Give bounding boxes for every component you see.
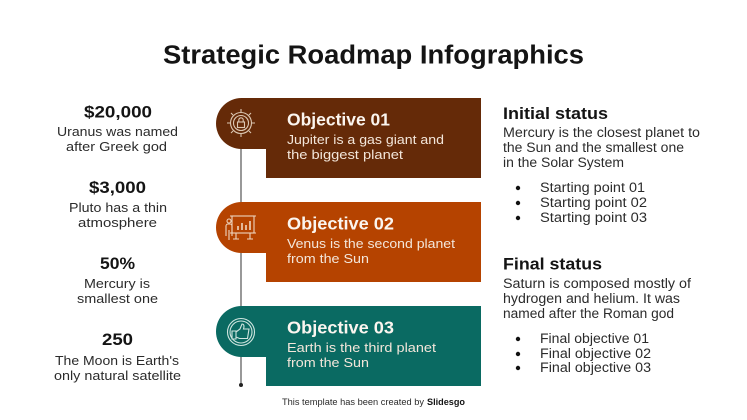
stat: 50% (77, 255, 158, 306)
stat: $20,000: $20,000 (84, 104, 152, 122)
text: final status description: Saturn is composed mostly of (503, 276, 691, 291)
text: initial status description: the Sun and the smallest one (503, 140, 684, 155)
text: initial status description: in the Solar System (503, 155, 624, 170)
panel: final status (503, 254, 691, 375)
text: objective 03 description (287, 340, 436, 370)
icon: presentation board (226, 216, 256, 240)
list: starting points: Starting point 02 (540, 195, 647, 210)
text: objective 01 description: Jupiter is a gas giant and (287, 132, 444, 147)
icon: target lock (227, 109, 255, 137)
text: objective 01 description (287, 132, 444, 162)
stat: 50%: Mercury is (84, 276, 150, 291)
text: objective 02 description: from the Sun (287, 251, 369, 266)
footer credit: This template has been created by (282, 397, 425, 407)
list: final objectives: Final objective 03 (540, 360, 651, 375)
heading: final status: Final status (503, 254, 602, 274)
panel: objective 03 (216, 306, 481, 386)
text: final status description (503, 276, 691, 321)
stat: $3,000 (69, 179, 167, 230)
heading: initial status: Initial status (503, 104, 608, 123)
stat: $3,000: $3,000 (89, 179, 146, 197)
panel: objective 02 (216, 202, 481, 282)
stat: $3,000: Pluto has a thin (69, 200, 167, 215)
heading: objective 02: Objective 02 (287, 214, 394, 234)
text: objective 03 description: Earth is the third planet (287, 340, 436, 355)
stat: $3,000: atmosphere (78, 215, 157, 230)
stat: $20,000: after Greek god (66, 139, 167, 154)
list: final objectives: Final objective 01 (540, 331, 649, 346)
panel: objective 01 (216, 98, 481, 178)
text: objective 02 description: Venus is the second planet (287, 236, 455, 251)
list: starting points: Starting point 01 (540, 180, 645, 195)
footer credit: Slidesgo (427, 397, 466, 407)
text: objective 01 description: the biggest planet (287, 147, 403, 162)
text: objective 02 description (287, 236, 455, 266)
stat: 250: only natural satellite (54, 368, 181, 383)
stat: 50%: smallest one (77, 291, 158, 306)
heading: objective 03: Objective 03 (287, 318, 394, 338)
text: final status description: hydrogen and helium. It was (503, 291, 680, 306)
icon: thumbs up badge (228, 318, 254, 346)
list: starting points: Starting point 03 (540, 210, 647, 225)
text: final status description: named after the Roman god (503, 306, 674, 321)
stat: $20,000: Uranus was named (57, 124, 178, 139)
list: starting points (516, 180, 647, 225)
title: Strategic Roadmap Infographics (163, 42, 584, 70)
timeline line (239, 145, 243, 387)
stat: 250: 250 (102, 331, 133, 349)
panel: initial status (503, 104, 700, 225)
text: initial status description (503, 125, 700, 170)
heading: objective 01: Objective 01 (287, 110, 390, 130)
stat: 250 (54, 331, 181, 383)
stat: 250: The Moon is Earth's (55, 353, 179, 368)
stat: 50%: 50% (100, 255, 135, 273)
stat: $20,000 (57, 104, 178, 154)
list: final objectives: Final objective 02 (540, 346, 651, 361)
list: final objectives (516, 331, 651, 375)
text: objective 03 description: from the Sun (287, 355, 369, 370)
text: initial status description: Mercury is the closest planet to (503, 125, 700, 140)
